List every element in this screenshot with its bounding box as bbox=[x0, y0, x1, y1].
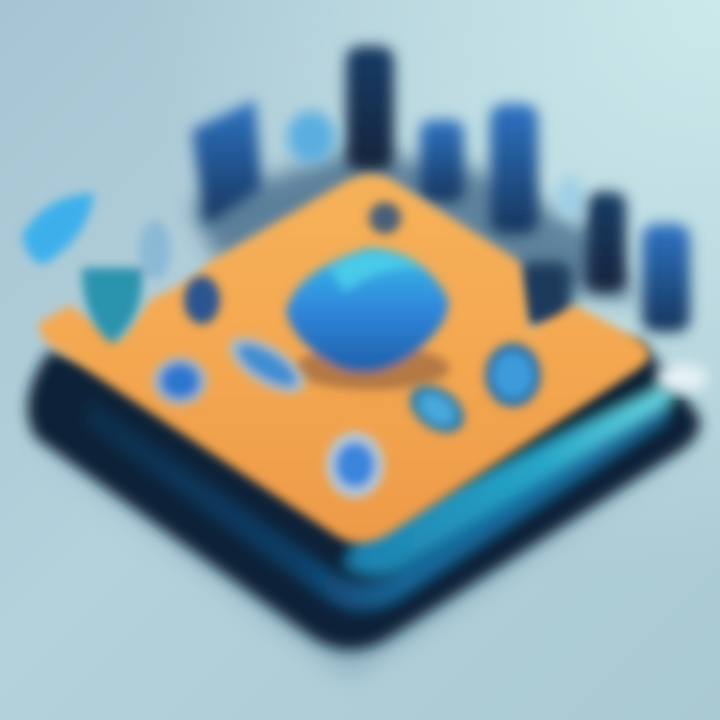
central gem bbox=[286, 248, 450, 390]
tower haze bbox=[190, 150, 640, 300]
tower: right dark bbox=[586, 192, 626, 292]
icon: pale diagonal bbox=[139, 220, 171, 280]
tower: left wide bbox=[192, 100, 262, 225]
platform base bbox=[28, 340, 700, 650]
icon: right disc bbox=[485, 343, 541, 407]
orange disc icons bbox=[153, 326, 541, 498]
icon: top disc bbox=[369, 202, 401, 234]
icon: center lower capsule bbox=[401, 375, 473, 443]
tower: blue bbox=[490, 104, 538, 234]
right highlight bbox=[656, 364, 708, 392]
tower: pale bbox=[556, 176, 584, 220]
icon: small dark disc bbox=[184, 276, 220, 324]
tower: tall dark bbox=[346, 46, 394, 171]
shadow under platform bbox=[30, 430, 710, 675]
orange platform top bbox=[39, 174, 649, 543]
icon: lower-left disc bbox=[153, 357, 207, 405]
background towers bbox=[192, 46, 690, 332]
tower: dark block bbox=[518, 262, 572, 328]
floating elements bbox=[22, 193, 401, 344]
icon: teal shield bbox=[82, 268, 142, 344]
tower: small blue bbox=[287, 111, 335, 163]
platform mid band bbox=[85, 395, 670, 609]
platform teal edge bbox=[345, 383, 672, 574]
icon: bottom disc bbox=[326, 432, 384, 498]
tower: far right bbox=[642, 224, 690, 332]
icon: floating blue leaf bbox=[22, 193, 94, 265]
icon: diagonal capsule bbox=[220, 326, 314, 404]
tower: short bbox=[420, 120, 464, 202]
